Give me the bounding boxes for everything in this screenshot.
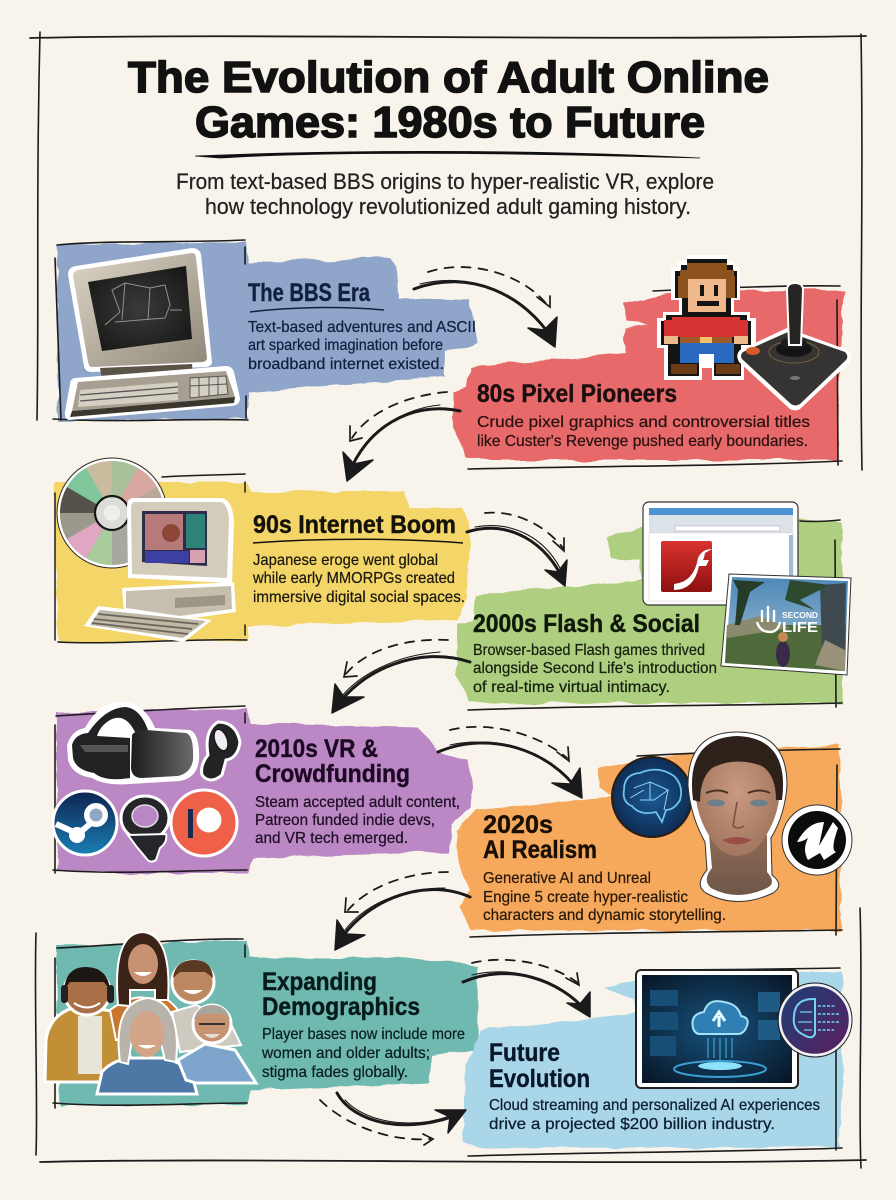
panel background: [54, 482, 470, 642]
arrow: 2000s to 2010s: [332, 640, 470, 713]
body text: Engine 5 create hyper-realistic: [483, 889, 688, 906]
icon: joystick: [737, 283, 851, 410]
icon: cloud tablet: [636, 970, 798, 1088]
panel: 80s pixel pioneers: [453, 255, 851, 469]
body text: Text-based adventures and ASCII: [248, 319, 476, 336]
body text: [261, 1026, 465, 1081]
heading: 2000s Flash & Social: [473, 610, 700, 638]
person: bearded man: [172, 960, 241, 1052]
body text: [483, 870, 726, 924]
body text: and VR tech emerged.: [255, 830, 408, 847]
panel: the BBS era: [53, 240, 477, 422]
body text: of real-time virtual intimacy.: [473, 679, 670, 696]
panel background: [57, 241, 477, 422]
arrow: 80s to 90s: [343, 392, 460, 481]
panel: 2010s VR and crowdfunding: [53, 702, 472, 873]
title: [128, 53, 769, 147]
arrow: 90s to 2000s: [467, 513, 567, 586]
heading: [483, 811, 597, 864]
title: Games: 1980s to Future: [195, 98, 705, 147]
sketch outline: [470, 749, 842, 937]
panel background: [463, 972, 842, 1148]
panel background: [56, 942, 478, 1106]
icon: VR controller: [202, 722, 240, 780]
person: older man with glasses: [178, 1005, 256, 1083]
person: older woman: [97, 998, 197, 1094]
heading: [262, 968, 420, 1021]
body text: Browser-based Flash games thrived: [473, 642, 705, 659]
panel background: [56, 709, 472, 873]
person: young woman: [110, 932, 180, 1040]
body text: [477, 414, 810, 450]
heading: Future: [489, 1039, 560, 1067]
panel: 2000s flash and social: [457, 502, 851, 710]
body text: Patreon funded indie devs,: [255, 812, 435, 829]
body text: characters and dynamic storytelling.: [483, 907, 726, 924]
icon: second life screenshot: SECOND: [782, 611, 818, 620]
sketch outline: [468, 968, 842, 1156]
body text: stigma fades globally.: [262, 1064, 408, 1081]
sketch outline: [53, 706, 247, 873]
body text: Generative AI and Unreal: [483, 870, 651, 887]
heading: AI Realism: [483, 836, 597, 864]
panel: future evolution: [463, 968, 852, 1156]
heading: 2020s: [483, 811, 553, 839]
icon: browser window with flash logo: [643, 502, 798, 605]
body text: immersive digital social spaces.: [253, 589, 465, 606]
icon: pixel character: [657, 255, 756, 380]
icon: patreon logo: [171, 790, 237, 856]
body text: women and older adults;: [261, 1045, 430, 1062]
icon: unreal engine logo: [782, 805, 852, 875]
subtitle: [176, 169, 714, 219]
title underline: [195, 151, 700, 158]
title: The Evolution of Adult Online: [128, 53, 769, 102]
heading: Evolution: [489, 1065, 590, 1093]
body text: alongside Second Life's introduction: [473, 660, 717, 677]
body text: Cloud streaming and personalized AI experiences: [489, 1097, 820, 1114]
body text: Crude pixel graphics and controversial titles: [477, 414, 810, 431]
icon: touch controller: [121, 796, 169, 862]
icon: second life screenshot: [721, 574, 851, 675]
sketch outline: [468, 286, 842, 469]
panel: 90s internet boom: [54, 458, 470, 643]
body text: [248, 319, 476, 373]
sketch outline: [55, 474, 247, 643]
arrow: 2020s to demographics: [335, 872, 470, 950]
arrow: BBS to 80s: [414, 267, 557, 347]
heading: 90s Internet Boom: [253, 511, 456, 539]
icon: steam logo: [53, 791, 117, 855]
icon: group of people: [45, 932, 256, 1094]
sketch outline: [468, 520, 842, 710]
heading: 80s Pixel Pioneers: [477, 380, 677, 408]
heading: [489, 1039, 590, 1093]
body text: broadband internet existed.: [248, 356, 444, 373]
heading: Demographics: [262, 993, 420, 1021]
icon: realistic AI face: [688, 732, 787, 902]
person: man with headset: [45, 967, 135, 1082]
body text: while early MMORPGs created: [252, 570, 455, 587]
heading: The BBS Era: [248, 279, 371, 307]
icon: neural brain circle: [778, 983, 852, 1057]
panel background: [453, 289, 843, 460]
heading: Crowdfunding: [255, 760, 410, 788]
subtitle: From text-based BBS origins to hyper-realistic VR, explore: [176, 169, 714, 194]
subtitle: how technology revolutionized adult gaming history.: [205, 194, 691, 219]
body text: [473, 642, 717, 696]
heading underline: [253, 539, 463, 543]
heading: 2010s VR &: [255, 735, 378, 763]
sketch outline: [53, 240, 248, 421]
icon: VR headset: [67, 702, 199, 784]
panel: 2020s AI realism: [457, 732, 852, 937]
panel background: [457, 518, 844, 704]
icon: 90s desktop computer: [84, 498, 236, 642]
icon: second life screenshot: LIFE: [782, 619, 818, 636]
panel: expanding demographics: [45, 932, 478, 1108]
heading underline: [250, 308, 384, 312]
body text: art sparked imagination before: [248, 337, 443, 354]
heading: Expanding: [262, 968, 377, 996]
body text: [255, 794, 460, 847]
body text: [252, 552, 465, 606]
panel background: [457, 745, 842, 931]
body text: Player bases now include more: [262, 1026, 465, 1043]
icon: AI brain: [612, 757, 692, 837]
body text: Steam accepted adult content,: [255, 794, 460, 811]
icon: retro computer: [65, 248, 240, 420]
sketch outline: [53, 939, 247, 1108]
arrow: 2010s to 2020s: [438, 727, 582, 798]
heading: [255, 735, 410, 788]
body text: [489, 1097, 820, 1133]
body text: drive a projected $200 billion industry.: [489, 1116, 775, 1133]
arrow: demographics to future (top): [463, 960, 590, 1017]
body text: like Custer's Revenge pushed early boundaries.: [477, 433, 808, 450]
arrow: demographics to future (bottom): [320, 1093, 466, 1145]
icon: CD: [57, 458, 167, 568]
body text: Japanese eroge went global: [253, 552, 438, 569]
